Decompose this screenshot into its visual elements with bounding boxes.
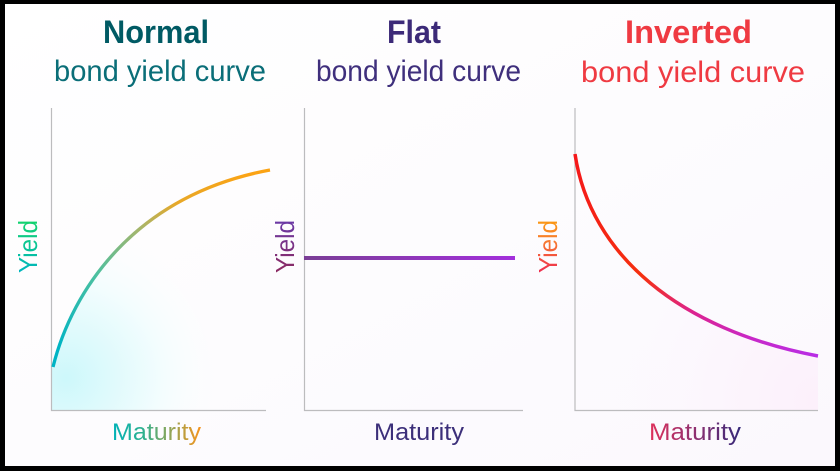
- panel: flat curve: [270, 14, 523, 446]
- heading: normal: Normal: [103, 14, 209, 50]
- heading: inverted: bond yield curve: [581, 56, 805, 89]
- axis label: yield: Yield: [13, 220, 43, 273]
- heading: normal: bond yield curve: [54, 55, 266, 88]
- heading: normal: [54, 14, 266, 88]
- axis label: maturity: Maturity: [112, 419, 201, 446]
- panel: normal curve: [13, 14, 270, 446]
- axis label: yield: Yield: [533, 220, 563, 273]
- chart: normal yield curve: [52, 108, 270, 410]
- axis label: maturity: Maturity: [374, 419, 464, 446]
- chart: flat yield curve: [304, 108, 523, 410]
- axis label: maturity: Maturity: [649, 419, 741, 446]
- heading: flat: Flat: [387, 14, 441, 50]
- heading: flat: [316, 14, 521, 88]
- panel: inverted curve: [533, 14, 818, 446]
- heading: flat: bond yield curve: [316, 55, 521, 88]
- heading: inverted: Inverted: [625, 14, 752, 50]
- chart: inverted yield curve: [575, 108, 818, 410]
- heading: inverted: [581, 14, 805, 89]
- axis label: yield: Yield: [270, 220, 300, 273]
